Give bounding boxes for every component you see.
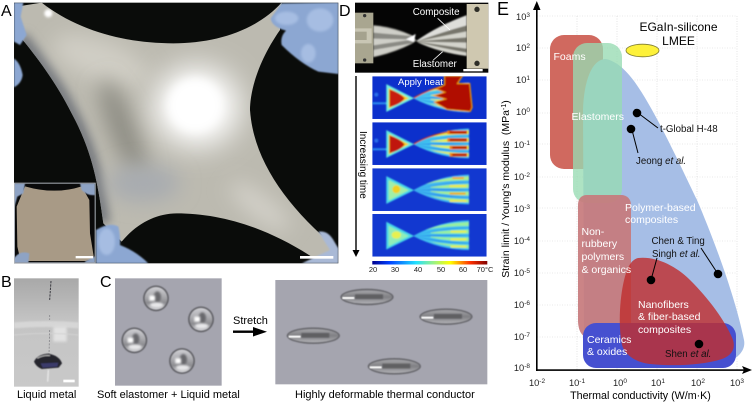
x tick labels: 3: [740, 378, 744, 385]
label composite: Composite: [413, 7, 460, 18]
data points: [627, 109, 722, 348]
y tick labels: 2: [526, 43, 530, 50]
y tick labels: -1: [524, 140, 530, 147]
x tick labels: 10: [651, 378, 661, 388]
droplet: [121, 327, 147, 353]
x tick labels: [529, 378, 744, 388]
x tick labels: -2: [539, 378, 545, 385]
stretched sheet: [20, 2, 331, 256]
LMEE label: [639, 20, 718, 48]
inset: unstretched sheet: [14, 183, 96, 263]
region labels: [554, 51, 701, 358]
panel D: specimen photo: [355, 3, 488, 73]
liquid metal pool: [34, 354, 62, 382]
y axis title: -1: [501, 104, 508, 110]
label elastomer: Elastomer: [413, 59, 458, 70]
region labels: Elastomers: [572, 111, 624, 123]
elongated droplet: [419, 308, 473, 325]
leader lines: [632, 113, 718, 280]
LMEE label: LMEE: [662, 34, 695, 48]
y tick labels: -7: [524, 332, 530, 339]
colour bar labels: 30: [391, 265, 399, 274]
colour bar labels: [369, 265, 494, 274]
stretch arrow: [233, 327, 267, 336]
caption C right: Highly deformable thermal conductor: [295, 389, 475, 401]
panel A: stretched elastomer photo: [0, 0, 350, 267]
elongated droplet: [368, 358, 421, 375]
y axis title: Strain limit / Young's modulus (MPa: [500, 110, 512, 278]
colour bar: [372, 261, 487, 264]
y tick labels: 10: [514, 268, 524, 278]
thermal map 4: [372, 214, 487, 257]
x tick labels: 10: [730, 378, 740, 388]
region labels: & organics: [582, 264, 631, 276]
label C: C: [100, 274, 112, 291]
label A: A: [1, 3, 12, 20]
y tick labels: -4: [524, 236, 530, 243]
y tick labels: -3: [524, 204, 530, 211]
elongated droplet: [287, 327, 340, 344]
colour bar labels: 50: [437, 265, 445, 274]
thermal map 2: [372, 122, 487, 165]
colour bar labels: 60: [459, 265, 467, 274]
y tick labels: 10: [514, 363, 524, 373]
x tick labels: 10: [529, 378, 539, 388]
colour bar labels: 20: [369, 265, 377, 274]
region: elastomers: [573, 43, 622, 203]
x tick labels: 1: [661, 378, 665, 385]
droplet: [169, 348, 195, 374]
data labels: Jeong et al.: [636, 156, 686, 167]
caption C left: Soft elastomer + Liquid metal: [97, 389, 240, 401]
region: ceramics and oxides: [583, 323, 736, 368]
region labels: composites: [638, 324, 691, 336]
region: nanofibers: [620, 258, 734, 365]
y tick labels: -2: [524, 172, 530, 179]
y tick labels: 10: [516, 43, 526, 53]
x tick labels: 10: [691, 378, 701, 388]
x tick labels: 10: [569, 378, 579, 388]
data labels: Chen & Ting: [652, 236, 705, 247]
panel C left: round droplets on elastomer: [115, 278, 222, 386]
data labels: t-Global H-48: [660, 124, 718, 135]
y tick labels: 10: [514, 204, 524, 214]
y axis title: ): [500, 100, 512, 104]
data labels: [636, 124, 718, 360]
y tick labels: [514, 12, 530, 373]
region labels: Foams: [554, 51, 586, 63]
region labels: polymers: [582, 251, 624, 263]
LMEE label: EGaIn-silicone: [639, 20, 718, 34]
droplet: [188, 306, 214, 332]
x tick labels: 2: [701, 378, 705, 385]
region: polymer-based composites: [583, 59, 744, 366]
label apply heat: Apply heat: [398, 77, 443, 88]
elongated droplet: [340, 289, 394, 305]
x axis title: Thermal conductivity (W/m·K): [570, 390, 711, 402]
gloves: [14, 3, 338, 263]
region labels: Nanofibers: [638, 299, 689, 311]
y tick labels: 10: [514, 300, 524, 310]
region labels: Non-: [582, 226, 605, 238]
stretch label: Stretch: [233, 315, 268, 327]
x tick labels: 0: [623, 378, 627, 385]
thermal map 3: [372, 168, 487, 211]
axes: [533, 1, 752, 374]
y tick labels: -6: [524, 300, 530, 307]
grid: [537, 16, 737, 370]
droplet: [143, 285, 169, 311]
region labels: Ceramics: [587, 334, 631, 346]
region labels: Polymer-based: [625, 202, 696, 214]
x tick labels: 10: [613, 378, 623, 388]
panel E: Ashby chart: [500, 1, 752, 402]
y tick labels: 10: [514, 172, 524, 182]
liquid metal stream: [49, 281, 51, 355]
region labels: & fiber-based: [638, 311, 701, 323]
region: foams: [550, 35, 603, 169]
scale bar: [63, 380, 75, 382]
y tick labels: 10: [514, 140, 524, 150]
y tick labels: -5: [524, 268, 530, 275]
panel C right: elongated droplets: [275, 280, 487, 384]
y tick labels: 3: [526, 12, 530, 19]
data labels: Shen et al.: [665, 349, 711, 360]
region: non-rubbery polymers: [578, 195, 631, 345]
y tick labels: -8: [524, 363, 530, 370]
colour bar labels: 70°C: [477, 265, 494, 274]
x tick labels: -1: [579, 378, 585, 385]
region labels: composites: [625, 214, 678, 226]
scale bar: [300, 256, 333, 259]
label D: D: [339, 3, 351, 20]
y tick labels: 1: [526, 75, 530, 82]
y tick labels: 10: [516, 107, 526, 117]
time arrow: [352, 76, 360, 257]
y tick labels: 10: [516, 75, 526, 85]
region labels: & oxides: [587, 346, 627, 358]
label B: B: [1, 274, 12, 291]
y tick labels: 10: [516, 12, 526, 22]
label increasing time: Increasing time: [357, 131, 368, 199]
highlight: LMEE ellipse: [626, 44, 659, 57]
y tick labels: 10: [514, 332, 524, 342]
caption B: Liquid metal: [17, 389, 76, 401]
y tick labels: 10: [514, 236, 524, 246]
panel B: liquid metal drop photo: [14, 278, 79, 387]
region labels: rubbery: [582, 238, 618, 250]
data labels: Singh et al.: [652, 249, 700, 260]
y tick labels: 0: [526, 107, 530, 114]
colour bar labels: 40: [414, 265, 422, 274]
thermal map 1: [372, 76, 487, 119]
